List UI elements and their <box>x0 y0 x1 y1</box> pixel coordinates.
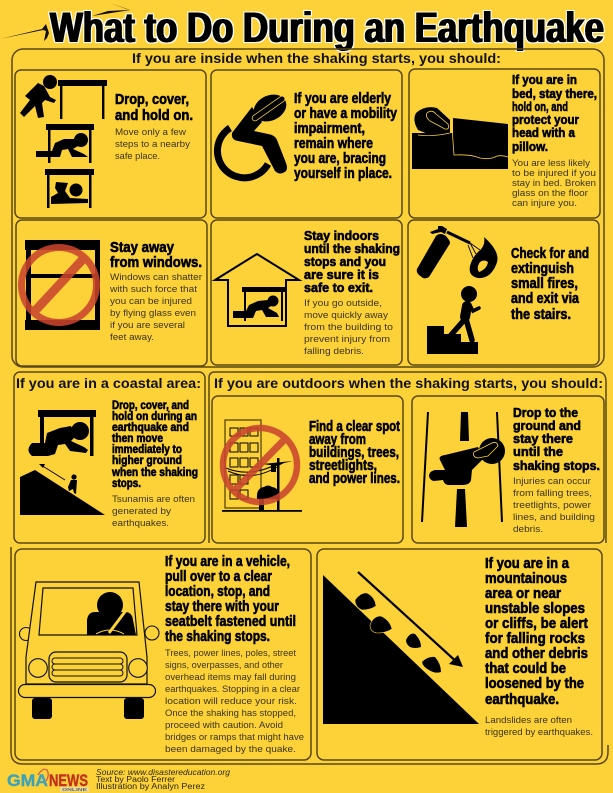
body text: Trees, power lines, poles, street <box>165 648 296 659</box>
heading: higher ground <box>112 455 182 467</box>
heading: or have a mobility <box>294 106 397 122</box>
body text <box>109 272 203 343</box>
body text: signs, overpasses, and other <box>165 660 284 671</box>
heading: impairment, <box>294 121 365 137</box>
heading: unstable slopes <box>485 601 585 617</box>
body text: you can be injured <box>110 296 192 307</box>
body text: treetlights, power <box>513 500 592 511</box>
icon: person in bed <box>412 107 508 169</box>
body text: earthquakes. Stopping in a clear <box>165 684 301 695</box>
heading: seatbelt fastened until <box>165 614 296 630</box>
heading: If you are in <box>512 72 577 87</box>
body text: Once the shaking has stopped, <box>165 708 296 719</box>
heading: then move <box>112 433 163 445</box>
body text: overhead items may fall during <box>165 672 296 683</box>
heading <box>511 246 589 323</box>
icon: person under table <box>28 410 96 456</box>
body text: generated by <box>112 506 171 517</box>
heading: outdoors: If you are outdoors when the shaking starts, you should: <box>214 375 603 391</box>
heading: Drop, cover, <box>115 92 189 108</box>
heading: Check for and <box>511 246 589 262</box>
heading: Drop to the <box>513 405 578 420</box>
body text: stay in bed. Broken <box>512 178 596 189</box>
heading: area or near <box>485 586 561 602</box>
heading: and exit via <box>511 291 580 307</box>
heading: the stairs. <box>511 307 571 323</box>
body text: from falling trees, <box>513 488 592 499</box>
card: mountain <box>317 549 602 760</box>
heading: If you are in a <box>485 556 570 572</box>
heading: stops. <box>112 478 141 490</box>
body text <box>165 648 304 755</box>
body text: Move only a few <box>115 127 186 138</box>
credits: Source: www.disastereducation.org <box>96 768 231 777</box>
heading <box>110 240 202 271</box>
body text: lines, and building <box>513 512 595 523</box>
body text: by flying glass even <box>110 308 196 319</box>
body text: You are less likely <box>512 158 590 169</box>
heading: safe to exit. <box>304 280 373 295</box>
heading: remain where <box>294 136 373 152</box>
body text: to be injured if you <box>512 168 596 179</box>
body text: been damaged by the quake. <box>165 744 296 755</box>
heading: the shaking stops. <box>165 629 270 645</box>
heading: from windows. <box>110 255 202 271</box>
body text <box>485 715 593 738</box>
icon: wheelchair <box>217 89 291 178</box>
heading: bed, stay there, <box>512 86 597 101</box>
heading: earthquake. <box>485 692 559 708</box>
body text <box>304 298 393 357</box>
body text: triggered by earthquakes. <box>485 727 593 738</box>
heading: that could be <box>485 661 566 677</box>
logo: GMA News Online: ONLINE <box>62 787 87 792</box>
icon: person on stairs <box>427 286 479 354</box>
icon: building, power line and prohibition sign <box>222 420 302 512</box>
heading: Stay indoors <box>304 228 379 243</box>
body text: Injuries can occur <box>513 476 592 487</box>
heading: hold on during an <box>112 411 197 423</box>
heading <box>513 405 600 473</box>
body text: steps to a nearby <box>115 139 190 150</box>
card: stay indoors <box>211 220 402 365</box>
card: clear spot <box>212 396 403 543</box>
heading: If you are in a vehicle, <box>165 554 290 570</box>
heading: until the shaking <box>304 241 400 256</box>
card: windows <box>16 220 207 366</box>
heading <box>165 554 296 645</box>
heading: and other debris <box>485 646 588 662</box>
card: vehicle <box>15 549 311 760</box>
body text: earthquakes. <box>112 518 169 529</box>
body text: feet away. <box>110 332 154 343</box>
card: drop to ground <box>412 396 604 543</box>
logo: GMA News Online: NEWS <box>49 771 88 790</box>
body text: proceed with caution. Avoid <box>165 720 283 731</box>
body text: falling debris. <box>304 346 364 357</box>
body text: if you are several <box>110 320 185 331</box>
heading: buildings, trees, <box>309 445 399 461</box>
heading: Stay away <box>110 240 174 256</box>
heading <box>512 72 597 154</box>
icon: fire extinguisher and flame <box>417 226 498 278</box>
body text <box>115 127 190 162</box>
heading: until the <box>513 444 563 459</box>
panel: inside <box>12 49 604 367</box>
heading: coastal: If you are in a coastal area: <box>16 375 201 391</box>
heading: and hold on. <box>115 108 193 124</box>
credits: Illustration by Analyn Perez <box>96 782 205 791</box>
heading: protect your <box>512 112 579 127</box>
credits: Text by Paolo Ferrer <box>96 775 175 784</box>
heading: stay there with your <box>165 599 279 615</box>
heading: when the shaking <box>111 467 198 479</box>
body text: Windows can shatter <box>110 272 203 283</box>
heading: Drop, cover, and <box>112 400 189 412</box>
icon: window with prohibition sign <box>22 240 100 330</box>
body text: safe place. <box>115 151 160 162</box>
body text: debris. <box>513 524 543 535</box>
heading: stay there <box>513 431 573 446</box>
heading: and power lines. <box>309 471 400 487</box>
logo: GMA News Online: GMA <box>7 771 48 790</box>
heading: small fires, <box>511 276 578 292</box>
panel: vehicle and mountain <box>11 547 608 764</box>
credits <box>96 768 231 791</box>
body text: If you go outside, <box>304 298 382 309</box>
heading: are sure it is <box>304 267 379 282</box>
heading <box>304 228 400 295</box>
card: mobility impairment <box>211 70 402 218</box>
heading: hold on, and <box>512 99 568 114</box>
heading: stops and you <box>304 254 386 269</box>
icon: person climbing hill <box>20 464 105 515</box>
body text <box>512 158 596 209</box>
body text: can injure you. <box>512 198 577 209</box>
heading: head with a <box>512 125 576 140</box>
body text <box>112 494 195 529</box>
heading: location, stop, and <box>165 584 270 600</box>
card: drop cover hold <box>15 70 206 218</box>
card: in bed <box>409 69 600 218</box>
heading: earthquake and <box>112 422 189 434</box>
heading: for falling rocks <box>485 631 585 647</box>
heading: Find a clear spot <box>309 419 400 435</box>
heading: pull over to a clear <box>165 569 272 585</box>
heading: immediately to <box>112 444 182 456</box>
heading: If you are elderly <box>294 91 391 107</box>
heading <box>485 556 588 708</box>
icon: drop cover hold on <box>20 75 107 208</box>
heading: pillow. <box>512 139 548 154</box>
heading: or cliffs, be alert <box>485 616 588 632</box>
body text: glass on the floor <box>512 188 589 199</box>
heading: shaking stops. <box>513 458 600 473</box>
body text: Landslides are often <box>485 715 572 726</box>
icon: house with person under table <box>215 254 299 326</box>
heading: away from <box>309 432 366 448</box>
body text: move quickly away <box>304 310 388 321</box>
body text: from the building to <box>304 322 393 333</box>
body text <box>513 476 595 535</box>
heading: yourself in place. <box>294 166 392 182</box>
panel: outdoors <box>209 372 606 543</box>
body text: bridges or ramps that might have <box>165 732 304 743</box>
heading <box>111 400 198 490</box>
body text: location will reduce your risk. <box>165 696 297 707</box>
heading: inside: If you are inside when the shaking starts, you should: <box>132 50 501 66</box>
heading: you are, bracing <box>294 151 386 167</box>
heading: loosened by the <box>485 676 584 692</box>
heading: mountainous <box>485 571 567 587</box>
panel: coastal <box>14 372 205 543</box>
heading: streetlights, <box>309 458 377 474</box>
card: small fires and stairs <box>408 220 599 365</box>
icon: car with driver <box>18 582 159 719</box>
heading <box>115 92 193 124</box>
body text: prevent injury from <box>304 334 390 345</box>
heading: ground and <box>513 418 581 433</box>
heading: extinguish <box>511 261 574 277</box>
body text: with such force that <box>109 284 197 295</box>
icon: person crouched on road <box>421 412 505 527</box>
body text: Tsunamis are often <box>112 494 195 505</box>
heading <box>294 91 397 182</box>
logo: GMA News Online <box>7 769 89 792</box>
icon: landslide <box>323 572 479 724</box>
heading <box>309 419 400 487</box>
